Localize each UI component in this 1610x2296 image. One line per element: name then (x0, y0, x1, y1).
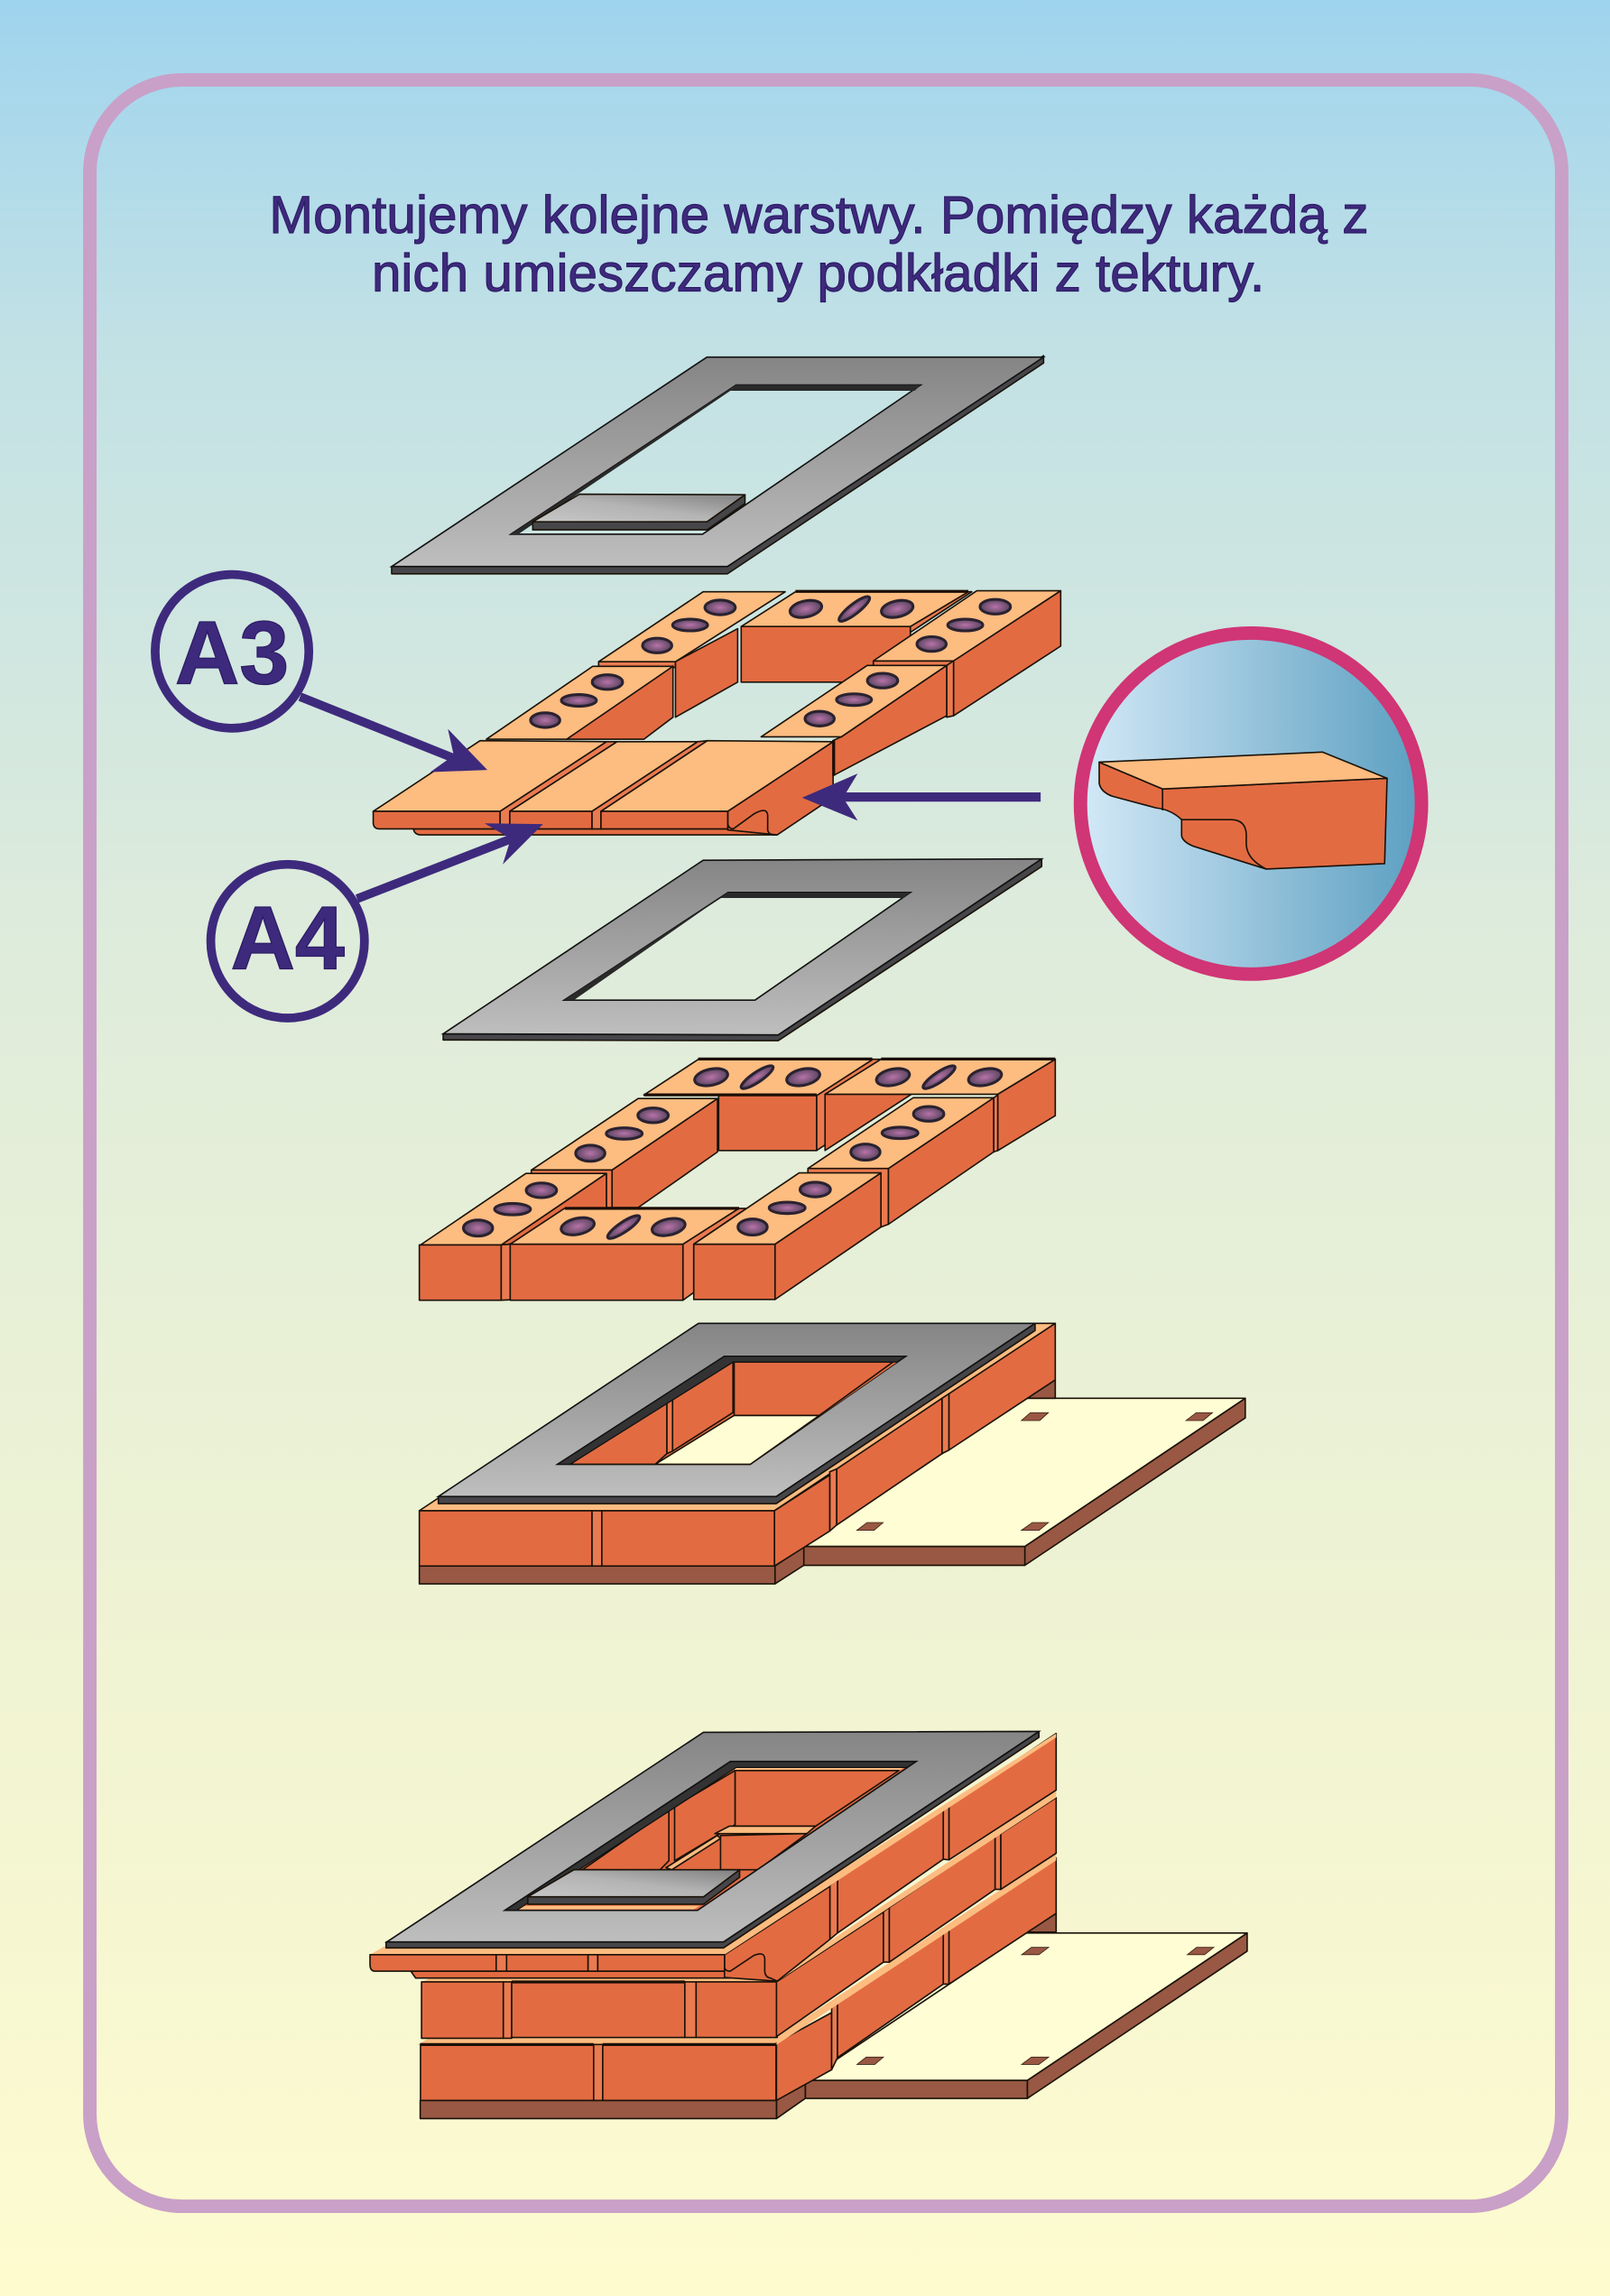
base board (804, 1398, 1245, 1565)
view through opening (504, 1762, 916, 1911)
callout A4 (211, 823, 543, 1018)
bricks: front (420, 1511, 774, 1566)
bricks: side (774, 1323, 1055, 1566)
cornice bricks A3 A4 (374, 741, 834, 835)
back-right brick (874, 591, 1060, 716)
bottom row (417, 1857, 1056, 2100)
gasket (387, 1731, 1039, 1942)
title: nich umieszczamy podkładki z tektury. (372, 245, 1264, 303)
brick: left front (420, 1173, 606, 1301)
brick: front centre (510, 1208, 746, 1301)
arrow: to detail (802, 773, 1041, 820)
view through opening (558, 1356, 906, 1464)
middle row (421, 1798, 1056, 2038)
brick layer with cornice (374, 591, 1060, 835)
first layer on base board (420, 1323, 1245, 1584)
title: Montujemy kolejne warstwy. Pomiędzy każdą z (269, 186, 1368, 245)
loose brick layer (420, 1059, 1055, 1301)
title (269, 186, 1368, 303)
brick: back-left (643, 1059, 881, 1151)
front-right brick (761, 661, 954, 776)
brick: right front (694, 1173, 881, 1300)
cornice side profile (727, 742, 833, 835)
brick: right rear (808, 1095, 998, 1227)
arrow: A3 (300, 697, 487, 773)
back-left brick (598, 592, 785, 718)
callout A4: A4 (230, 888, 345, 988)
back brick (741, 591, 972, 682)
small plate (532, 495, 745, 530)
brick: back-right (825, 1059, 1055, 1151)
middle gasket (443, 859, 1041, 1041)
arrow: A4 (357, 823, 543, 899)
callout A3: A3 (175, 602, 289, 702)
top gasket with plate (392, 356, 1043, 574)
cornice row (370, 1734, 1056, 1981)
gasket thickness (386, 1731, 1039, 1948)
gasket thickness (439, 1323, 1035, 1504)
small plate (528, 1870, 740, 1904)
base board (805, 1933, 1247, 2098)
cornice detail (1099, 752, 1387, 869)
detail lens (1080, 633, 1421, 974)
peach top (420, 1323, 1055, 1511)
gasket (439, 1323, 1035, 1496)
callout A3 (155, 575, 487, 773)
assembled model (370, 1731, 1247, 2118)
peach under cornice (776, 1790, 1056, 1982)
brick: left rear (532, 1098, 717, 1208)
front-left brick (486, 666, 673, 739)
peach between rows (776, 1853, 1056, 2045)
